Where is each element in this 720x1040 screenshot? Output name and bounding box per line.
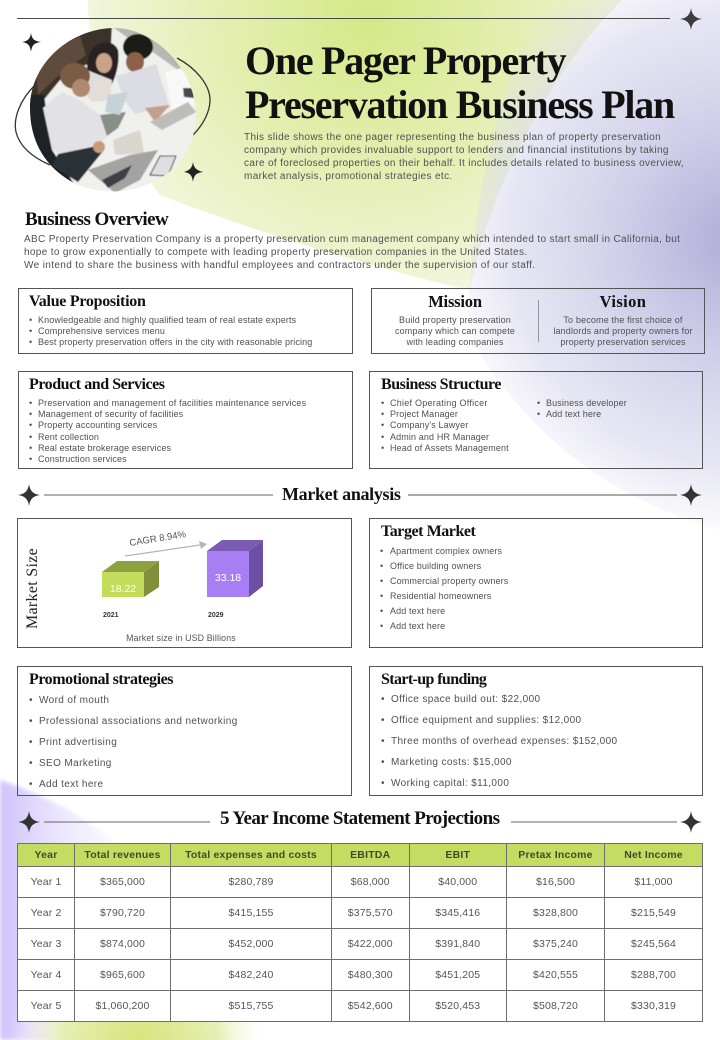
table: income statement: $215,549 — [631, 907, 676, 919]
intro text: market analysis, promotional strategies etc. — [244, 171, 453, 182]
table: income statement: Year 4 — [31, 969, 61, 981]
promotional list: Print advertising — [39, 737, 117, 748]
product list: • — [29, 454, 32, 464]
table: income statement: $515,755 — [228, 1000, 274, 1012]
funding list: Three months of overhead expenses: $152,000 — [391, 736, 617, 747]
target market list: • — [380, 606, 383, 616]
section heading: market analysis: Market analysis — [282, 484, 401, 504]
heading: product and services: Product and Services — [29, 376, 165, 393]
table: income statement: $280,789 — [228, 876, 274, 888]
table: income statement: $790,720 — [100, 907, 145, 919]
funding list: Office equipment and supplies: $12,000 — [391, 715, 582, 726]
target market list: Commercial property owners — [390, 576, 508, 586]
structure list: Head of Assets Management — [390, 443, 509, 453]
top rule and sparkle — [17, 8, 702, 30]
heading: start-up funding: Start-up funding — [381, 671, 486, 688]
mission: Mission — [428, 292, 482, 311]
value proposition list: Best property preservation offers in the city with reasonable pricing — [38, 337, 312, 347]
table: income statement: $480,300 — [348, 969, 393, 981]
product list: Property accounting services — [38, 420, 157, 430]
target market list: • — [380, 576, 383, 586]
table: income statement: $40,000 — [438, 876, 477, 888]
table: income statement: $1,060,200 — [95, 1000, 150, 1012]
product list: • — [29, 409, 32, 419]
panel: product and services — [18, 371, 353, 469]
table: income statement: $422,000 — [348, 938, 393, 950]
panel: value proposition — [18, 288, 353, 354]
table: income statement: $245,564 — [631, 938, 676, 950]
value proposition list: Comprehensive services menu — [38, 326, 165, 336]
funding list: Marketing costs: $15,000 — [391, 757, 512, 768]
mission: with leading companies — [406, 337, 504, 347]
promotional list: • — [29, 779, 33, 790]
table: income statement: $68,000 — [351, 876, 390, 888]
funding list: • — [381, 736, 385, 747]
table: income statement: $451,205 — [435, 969, 480, 981]
product list: • — [29, 443, 32, 453]
structure list: • — [381, 420, 384, 430]
structure list: Project Manager — [390, 409, 458, 419]
panel: promotional strategies — [17, 666, 352, 796]
structure list: • — [381, 409, 384, 419]
table: income statement: EBIT — [445, 849, 470, 861]
structure list: Business developer — [546, 398, 627, 408]
chart caption: Market size in USD Billions — [126, 633, 236, 643]
table: income statement: Year 5 — [31, 1000, 61, 1012]
bar 2029: 33.18 — [215, 572, 241, 584]
intro text: care of foreclosed properties on their behalf. It includes details related to business overview, — [244, 158, 684, 169]
table: income statement: $330,319 — [631, 1000, 676, 1012]
funding list: Working capital: $11,000 — [391, 778, 509, 789]
intro text: company which provides invaluable support to lenders and financial institutions by taking — [244, 145, 669, 156]
intro text — [244, 132, 684, 182]
table: income statement: $542,600 — [348, 1000, 393, 1012]
table: income statement: Net Income — [624, 849, 683, 861]
section heading: income projections — [18, 808, 702, 833]
table: income statement: $520,453 — [435, 1000, 480, 1012]
business overview text — [24, 234, 680, 271]
funding list — [381, 694, 617, 789]
axis title: Market Size — [24, 548, 41, 629]
mission: company which can compete — [395, 326, 515, 336]
table: income statement: $420,555 — [533, 969, 578, 981]
table: income statement: $16,500 — [536, 876, 575, 888]
target market list: • — [380, 546, 383, 556]
target market list — [380, 546, 508, 631]
right woman — [123, 34, 153, 60]
mission: Build property preservation — [399, 315, 511, 325]
photo of team in blob with orbit ring — [14, 28, 211, 192]
middle woman — [87, 42, 119, 84]
promotional list: SEO Marketing — [39, 758, 112, 769]
promotional list: Add text here — [39, 779, 103, 790]
table: income statement: Year 2 — [31, 907, 61, 919]
business overview text: ABC Property Preservation Company is a property preservation cum management company which intended to start small in California, but — [24, 234, 680, 245]
left man's head — [60, 63, 90, 89]
intro text: This slide shows the one pager representing the business plan of property preservation — [244, 132, 661, 143]
product list: Preservation and management of facilities maintenance services — [38, 398, 306, 408]
product list: Rent collection — [38, 432, 99, 442]
structure list: Add text here — [546, 409, 601, 419]
funding list: • — [381, 694, 385, 705]
value proposition list: • — [29, 337, 32, 347]
table: income statement: Total expenses and costs — [185, 849, 317, 861]
vision — [553, 292, 693, 347]
table: income statement: $11,000 — [634, 876, 673, 888]
title — [245, 38, 675, 127]
structure list: • — [537, 398, 540, 408]
product list — [29, 398, 306, 464]
vision: property preservation services — [560, 337, 686, 347]
table: income statement: $391,840 — [435, 938, 480, 950]
table: income statement: Total revenues — [84, 849, 161, 861]
table: income statement: $365,000 — [100, 876, 145, 888]
panel: mission and vision — [371, 288, 705, 354]
mission — [395, 292, 515, 347]
structure list: • — [381, 398, 384, 408]
table: income statement: $482,240 — [228, 969, 274, 981]
structure list — [381, 398, 627, 453]
left man's body — [43, 92, 107, 155]
promotional list: • — [29, 716, 33, 727]
panel: target market — [369, 518, 703, 648]
CAGR arrow — [125, 529, 207, 556]
table: income statement: Pretax Income — [518, 849, 593, 861]
heading: value proposition: Value Proposition — [29, 293, 146, 310]
table: income statement: Year 1 — [31, 876, 61, 888]
heading: business overview: Business Overview — [25, 209, 168, 230]
structure list: Company's Lawyer — [390, 420, 468, 430]
table: income statement: Year — [34, 849, 58, 861]
section heading: income projections: 5 Year Income Statement Projections — [220, 808, 499, 829]
panel: market size chart — [17, 518, 352, 648]
value proposition list: • — [29, 315, 32, 325]
table: income statement: $415,155 — [228, 907, 274, 919]
business overview text: We intend to share the business with handful employees and contractors under the supervision of our staff. — [24, 260, 535, 271]
table: income statement — [17, 843, 703, 1022]
funding list: Office space build out: $22,000 — [391, 694, 540, 705]
title: Preservation Business Plan — [245, 82, 674, 127]
table: income statement: $328,800 — [533, 907, 578, 919]
structure list: • — [381, 432, 384, 442]
table: income statement: $375,240 — [533, 938, 578, 950]
promotional list: • — [29, 758, 33, 769]
CAGR arrow: CAGR 8.94% — [129, 529, 187, 549]
panel: business structure — [369, 371, 703, 469]
product list: Construction services — [38, 454, 127, 464]
table: income statement: $288,700 — [631, 969, 676, 981]
promotional list: Professional associations and networking — [39, 716, 238, 727]
target market list: Apartment complex owners — [390, 546, 502, 556]
promotional list: Word of mouth — [39, 695, 109, 706]
target market list: Office building owners — [390, 561, 481, 571]
title: One Pager Property — [245, 38, 565, 83]
structure list: Admin and HR Manager — [390, 432, 489, 442]
year labels — [103, 612, 224, 619]
vision: To become the first choice of — [563, 315, 683, 325]
table: income statement: $874,000 — [100, 938, 145, 950]
value proposition list — [29, 315, 312, 347]
target market list: • — [380, 591, 383, 601]
target market list: Add text here — [390, 621, 445, 631]
product list: Management of security of facilities — [38, 409, 183, 419]
year labels: 2029 — [208, 612, 224, 619]
table: income statement: $965,600 — [100, 969, 145, 981]
table: income statement: $508,720 — [533, 1000, 578, 1012]
value proposition list: • — [29, 326, 32, 336]
product list: • — [29, 398, 32, 408]
bar 2021: 18.22 — [110, 583, 136, 595]
funding list: • — [381, 715, 385, 726]
table: income statement: EBITDA — [350, 849, 390, 861]
value proposition list: Knowledgeable and highly qualified team of real estate experts — [38, 315, 296, 325]
promotional list — [29, 695, 238, 790]
bar 2021 — [102, 561, 159, 597]
table: income statement: Year 3 — [31, 938, 61, 950]
vision: landlords and property owners for — [553, 326, 693, 336]
promotional list: • — [29, 737, 33, 748]
panel: start-up funding — [369, 666, 703, 796]
section heading: market analysis — [18, 484, 702, 506]
table objects — [72, 105, 196, 193]
structure list: Chief Operating Officer — [390, 398, 488, 408]
target market list: Residential homeowners — [390, 591, 491, 601]
structure list: • — [381, 443, 384, 453]
table: income statement: $375,570 — [348, 907, 393, 919]
target market list: • — [380, 561, 383, 571]
product list: • — [29, 420, 32, 430]
business overview text: hope to grow exponentially to compete with leading property preservation companies in the United States. — [24, 247, 527, 258]
product list: Real estate brokerage eservices — [38, 443, 171, 453]
promotional list: • — [29, 695, 33, 706]
table: income statement: $345,416 — [435, 907, 480, 919]
heading: target market: Target Market — [381, 523, 475, 540]
product list: • — [29, 432, 32, 442]
table: income statement: $452,000 — [228, 938, 274, 950]
heading: business structure: Business Structure — [381, 376, 501, 393]
target market list: • — [380, 621, 383, 631]
bar 2029 — [207, 540, 263, 597]
vision: Vision — [600, 292, 646, 311]
heading: promotional strategies: Promotional strategies — [29, 671, 173, 688]
structure list: • — [537, 409, 540, 419]
year labels: 2021 — [103, 612, 119, 619]
funding list: • — [381, 778, 385, 789]
funding list: • — [381, 757, 385, 768]
target market list: Add text here — [390, 606, 445, 616]
